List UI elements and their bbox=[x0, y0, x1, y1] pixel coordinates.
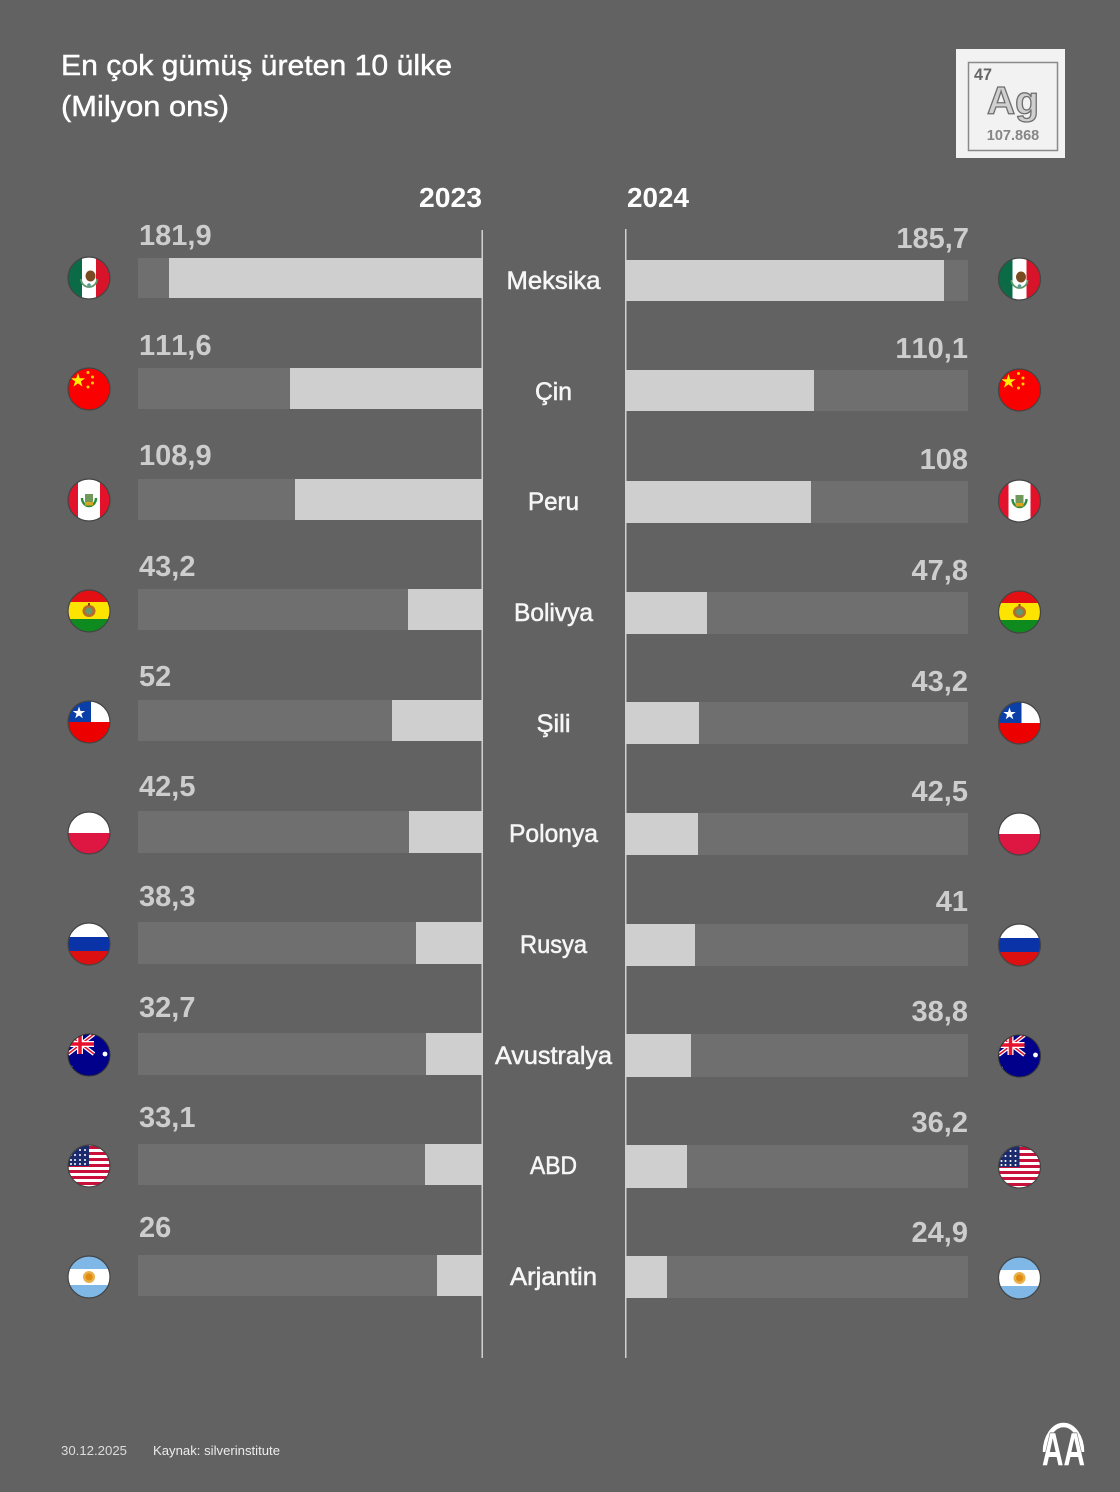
row: Meksika: Meksika bbox=[506, 267, 601, 295]
row: Çin: 110,1 bbox=[895, 333, 968, 365]
year heading 2024: 2024 bbox=[627, 182, 689, 213]
row: Rusya bbox=[68, 881, 1040, 966]
row: ABD: 33,1 bbox=[139, 1102, 195, 1134]
title: En çok gümüş üreten 10 ülke bbox=[61, 50, 452, 82]
row: Şili: 52 bbox=[139, 661, 171, 693]
row: Rusya: 41 bbox=[936, 886, 968, 918]
row: Peru: 108,9 bbox=[139, 440, 212, 472]
row: Rusya: Rusya bbox=[520, 931, 587, 959]
icon: silver element tile bbox=[956, 49, 1065, 158]
logo: AA: AA bbox=[1042, 1423, 1085, 1475]
row: Arjantin bbox=[68, 1212, 1040, 1299]
logo: AA bbox=[1042, 1423, 1085, 1475]
row: ABD: 36,2 bbox=[912, 1107, 968, 1139]
row: Arjantin: 24,9 bbox=[912, 1217, 968, 1249]
row: Polonya bbox=[68, 771, 1040, 855]
row: Arjantin: Arjantin bbox=[510, 1263, 597, 1291]
row: Çin bbox=[68, 330, 1040, 411]
row: Avustralya: Avustralya bbox=[495, 1042, 612, 1070]
year heading 2023: 2023 bbox=[419, 182, 482, 213]
row: Meksika bbox=[68, 220, 1040, 301]
row: Şili: Şili bbox=[536, 710, 570, 738]
row: Peru: Peru bbox=[528, 488, 579, 516]
title: (Milyon ons) bbox=[61, 91, 229, 123]
row: Rusya: 38,3 bbox=[139, 881, 195, 913]
row: Çin: Çin bbox=[535, 378, 572, 406]
row: Polonya: Polonya bbox=[509, 820, 598, 848]
source: Kaynak: silverinstitute bbox=[153, 1444, 280, 1458]
row: Peru: 108 bbox=[920, 444, 968, 476]
icon: silver element tile: 107.868 bbox=[987, 128, 1039, 144]
row: Meksika: 185,7 bbox=[896, 223, 969, 255]
row: Şili: 43,2 bbox=[912, 666, 968, 698]
title bbox=[61, 50, 452, 123]
date: 30.12.2025 bbox=[61, 1444, 127, 1458]
row: Bolivya: Bolivya bbox=[514, 599, 593, 627]
row: Bolivya: 47,8 bbox=[912, 555, 968, 587]
row: Polonya: 42,5 bbox=[912, 776, 968, 808]
icon: silver element tile: Ag bbox=[987, 80, 1039, 123]
row: Avustralya: 38,8 bbox=[912, 996, 968, 1028]
row: ABD: ABD bbox=[530, 1152, 577, 1180]
row: Polonya: 42,5 bbox=[139, 771, 195, 803]
row: Peru bbox=[68, 440, 1040, 523]
row: Bolivya bbox=[68, 551, 1040, 634]
row: Çin: 111,6 bbox=[139, 330, 212, 362]
row: Şili bbox=[68, 661, 1040, 744]
row: Avustralya: 32,7 bbox=[139, 992, 195, 1024]
row: Avustralya bbox=[68, 992, 1040, 1077]
row: Arjantin: 26 bbox=[139, 1212, 171, 1244]
row: ABD bbox=[68, 1102, 1040, 1188]
row: Meksika: 181,9 bbox=[139, 220, 212, 252]
icon: silver element tile: 47 bbox=[974, 65, 992, 84]
row: Bolivya: 43,2 bbox=[139, 551, 195, 583]
